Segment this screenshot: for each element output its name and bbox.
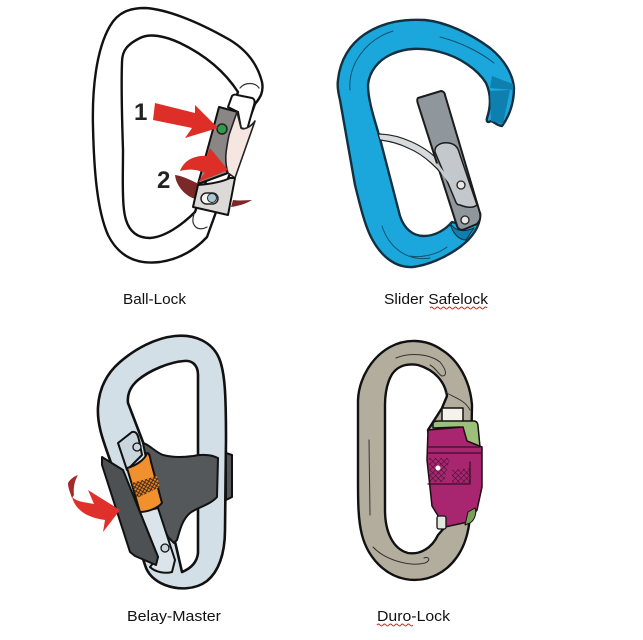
slider body (417, 91, 480, 230)
arrow 2 (180, 148, 228, 182)
gate loop (193, 84, 259, 229)
carabiner body (98, 336, 226, 588)
rivets (457, 181, 465, 189)
gate rivets (133, 443, 141, 451)
ridge band (428, 447, 482, 484)
wire gate (378, 134, 454, 185)
gate lower (140, 508, 175, 573)
panel: Ball-Lock carabiner (93, 8, 263, 263)
panel: Duro-Lock carabiner (358, 341, 482, 580)
red arrow (72, 490, 120, 532)
inner opening (385, 365, 447, 553)
rotation arrow tail (175, 175, 252, 207)
shade at hook (450, 223, 474, 240)
knurled patches (429, 458, 470, 483)
panel: Belay-Master carabiner (68, 336, 232, 588)
lower collar (193, 178, 235, 215)
gate upper (118, 432, 142, 470)
label: Belay-Master: Belay-Master (127, 608, 221, 625)
green collar (433, 421, 480, 450)
shade at nose (490, 76, 513, 124)
label: Slider Safelock: Slider Safelock (384, 291, 489, 308)
pink sleeve (427, 427, 482, 527)
wire end over plate (437, 165, 450, 182)
red arrow tail (68, 475, 78, 498)
number 2: 2 (157, 167, 170, 194)
dark sleeve (198, 107, 238, 184)
slider plate (435, 143, 477, 207)
number 1: 1 (134, 99, 147, 126)
belay plate front (102, 457, 158, 565)
label: Duro-Lock: Duro-Lock (377, 608, 451, 625)
carabiner body (358, 341, 472, 580)
green ball (217, 124, 227, 134)
body detail lines (369, 355, 470, 564)
carabiner body (338, 20, 514, 267)
gate stud top (442, 408, 463, 422)
orange sleeve (127, 453, 162, 512)
right tab (226, 453, 232, 500)
highlights (350, 31, 494, 259)
pink sleeve (226, 112, 255, 178)
body bump (385, 172, 390, 184)
green clip side (465, 508, 476, 525)
white dot (436, 466, 440, 470)
arrow 1 (153, 103, 218, 138)
label: Ball-Lock: Ball-Lock (123, 291, 186, 308)
panel: Slider Safelock carabiner (338, 20, 514, 267)
belay plate rear (143, 443, 218, 543)
rivet (201, 193, 218, 204)
carabiner body (93, 8, 263, 263)
gate nose (228, 95, 255, 130)
lower stud (437, 516, 446, 529)
knurled band (132, 476, 160, 498)
